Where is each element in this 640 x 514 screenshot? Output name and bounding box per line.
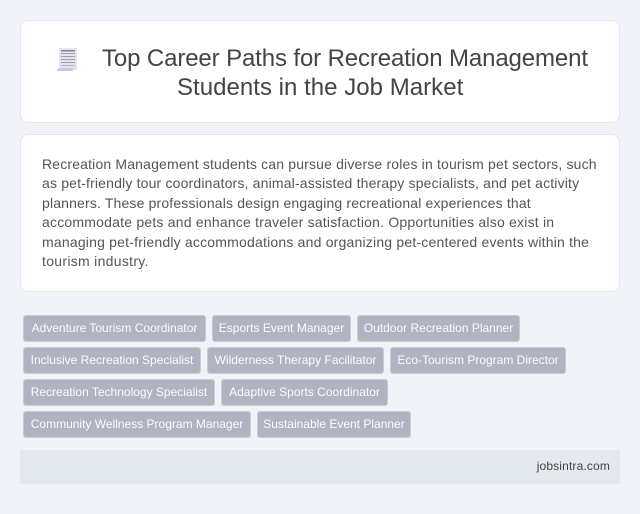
panel: title card [20, 20, 620, 123]
tag: Recreation Technology Specialist: Recreation Technology Specialist [31, 385, 207, 399]
description line 3: planners. These professionals design engaging recreational experiences that [42, 195, 531, 211]
panel: description card [20, 134, 620, 292]
footer source text: jobsintra.com [537, 459, 610, 473]
tag: Esports Event Manager: Esports Event Manager [219, 321, 344, 335]
tag: Eco-Tourism Program Director: Eco-Tourism Program Director [397, 353, 559, 367]
tag: Community Wellness Program Manager [23, 411, 251, 438]
heading line 1: Top Career Paths for Recreation Management [102, 45, 588, 72]
description line 4: accommodate pets and enhance traveler satisfaction. Opportunities also exist in [42, 214, 554, 230]
description line 6: tourism industry. [42, 253, 149, 269]
tag: Community Wellness Program Manager: Community Wellness Program Manager [31, 417, 243, 431]
tag: Sustainable Event Planner: Sustainable Event Planner [263, 417, 405, 431]
tag: Sustainable Event Planner [257, 411, 411, 438]
description line 1: Recreation Management students can pursue diverse roles in tourism pet sectors, such [42, 156, 597, 172]
tag: Adventure Tourism Coordinator: Adventure Tourism Coordinator [32, 321, 197, 335]
footer bar [20, 450, 620, 484]
description line 2: as pet-friendly tour coordinators, animal-assisted therapy specialists, and pet activity [42, 175, 579, 191]
heading line 2: Students in the Job Market [177, 74, 463, 101]
tag: Esports Event Manager [212, 315, 351, 342]
tag: Adaptive Sports Coordinator [221, 379, 388, 406]
tag: Wilderness Therapy Facilitator: Wilderness Therapy Facilitator [215, 353, 376, 367]
tag: Inclusive Recreation Specialist [23, 347, 201, 374]
tag: Adaptive Sports Coordinator: Adaptive Sports Coordinator [229, 385, 380, 399]
tag: Recreation Technology Specialist [23, 379, 215, 406]
icon: paper scroll document [57, 48, 77, 71]
tag: Eco-Tourism Program Director [390, 347, 566, 374]
description line 5: managing pet-friendly accommodations and organizing pet-centered events within the [42, 234, 589, 250]
tag: Inclusive Recreation Specialist: Inclusive Recreation Specialist [31, 353, 193, 367]
tag: Outdoor Recreation Planner [357, 315, 520, 342]
tag: Outdoor Recreation Planner: Outdoor Recreation Planner [364, 321, 513, 335]
tag: Adventure Tourism Coordinator [23, 315, 206, 342]
tag: Wilderness Therapy Facilitator [207, 347, 384, 374]
